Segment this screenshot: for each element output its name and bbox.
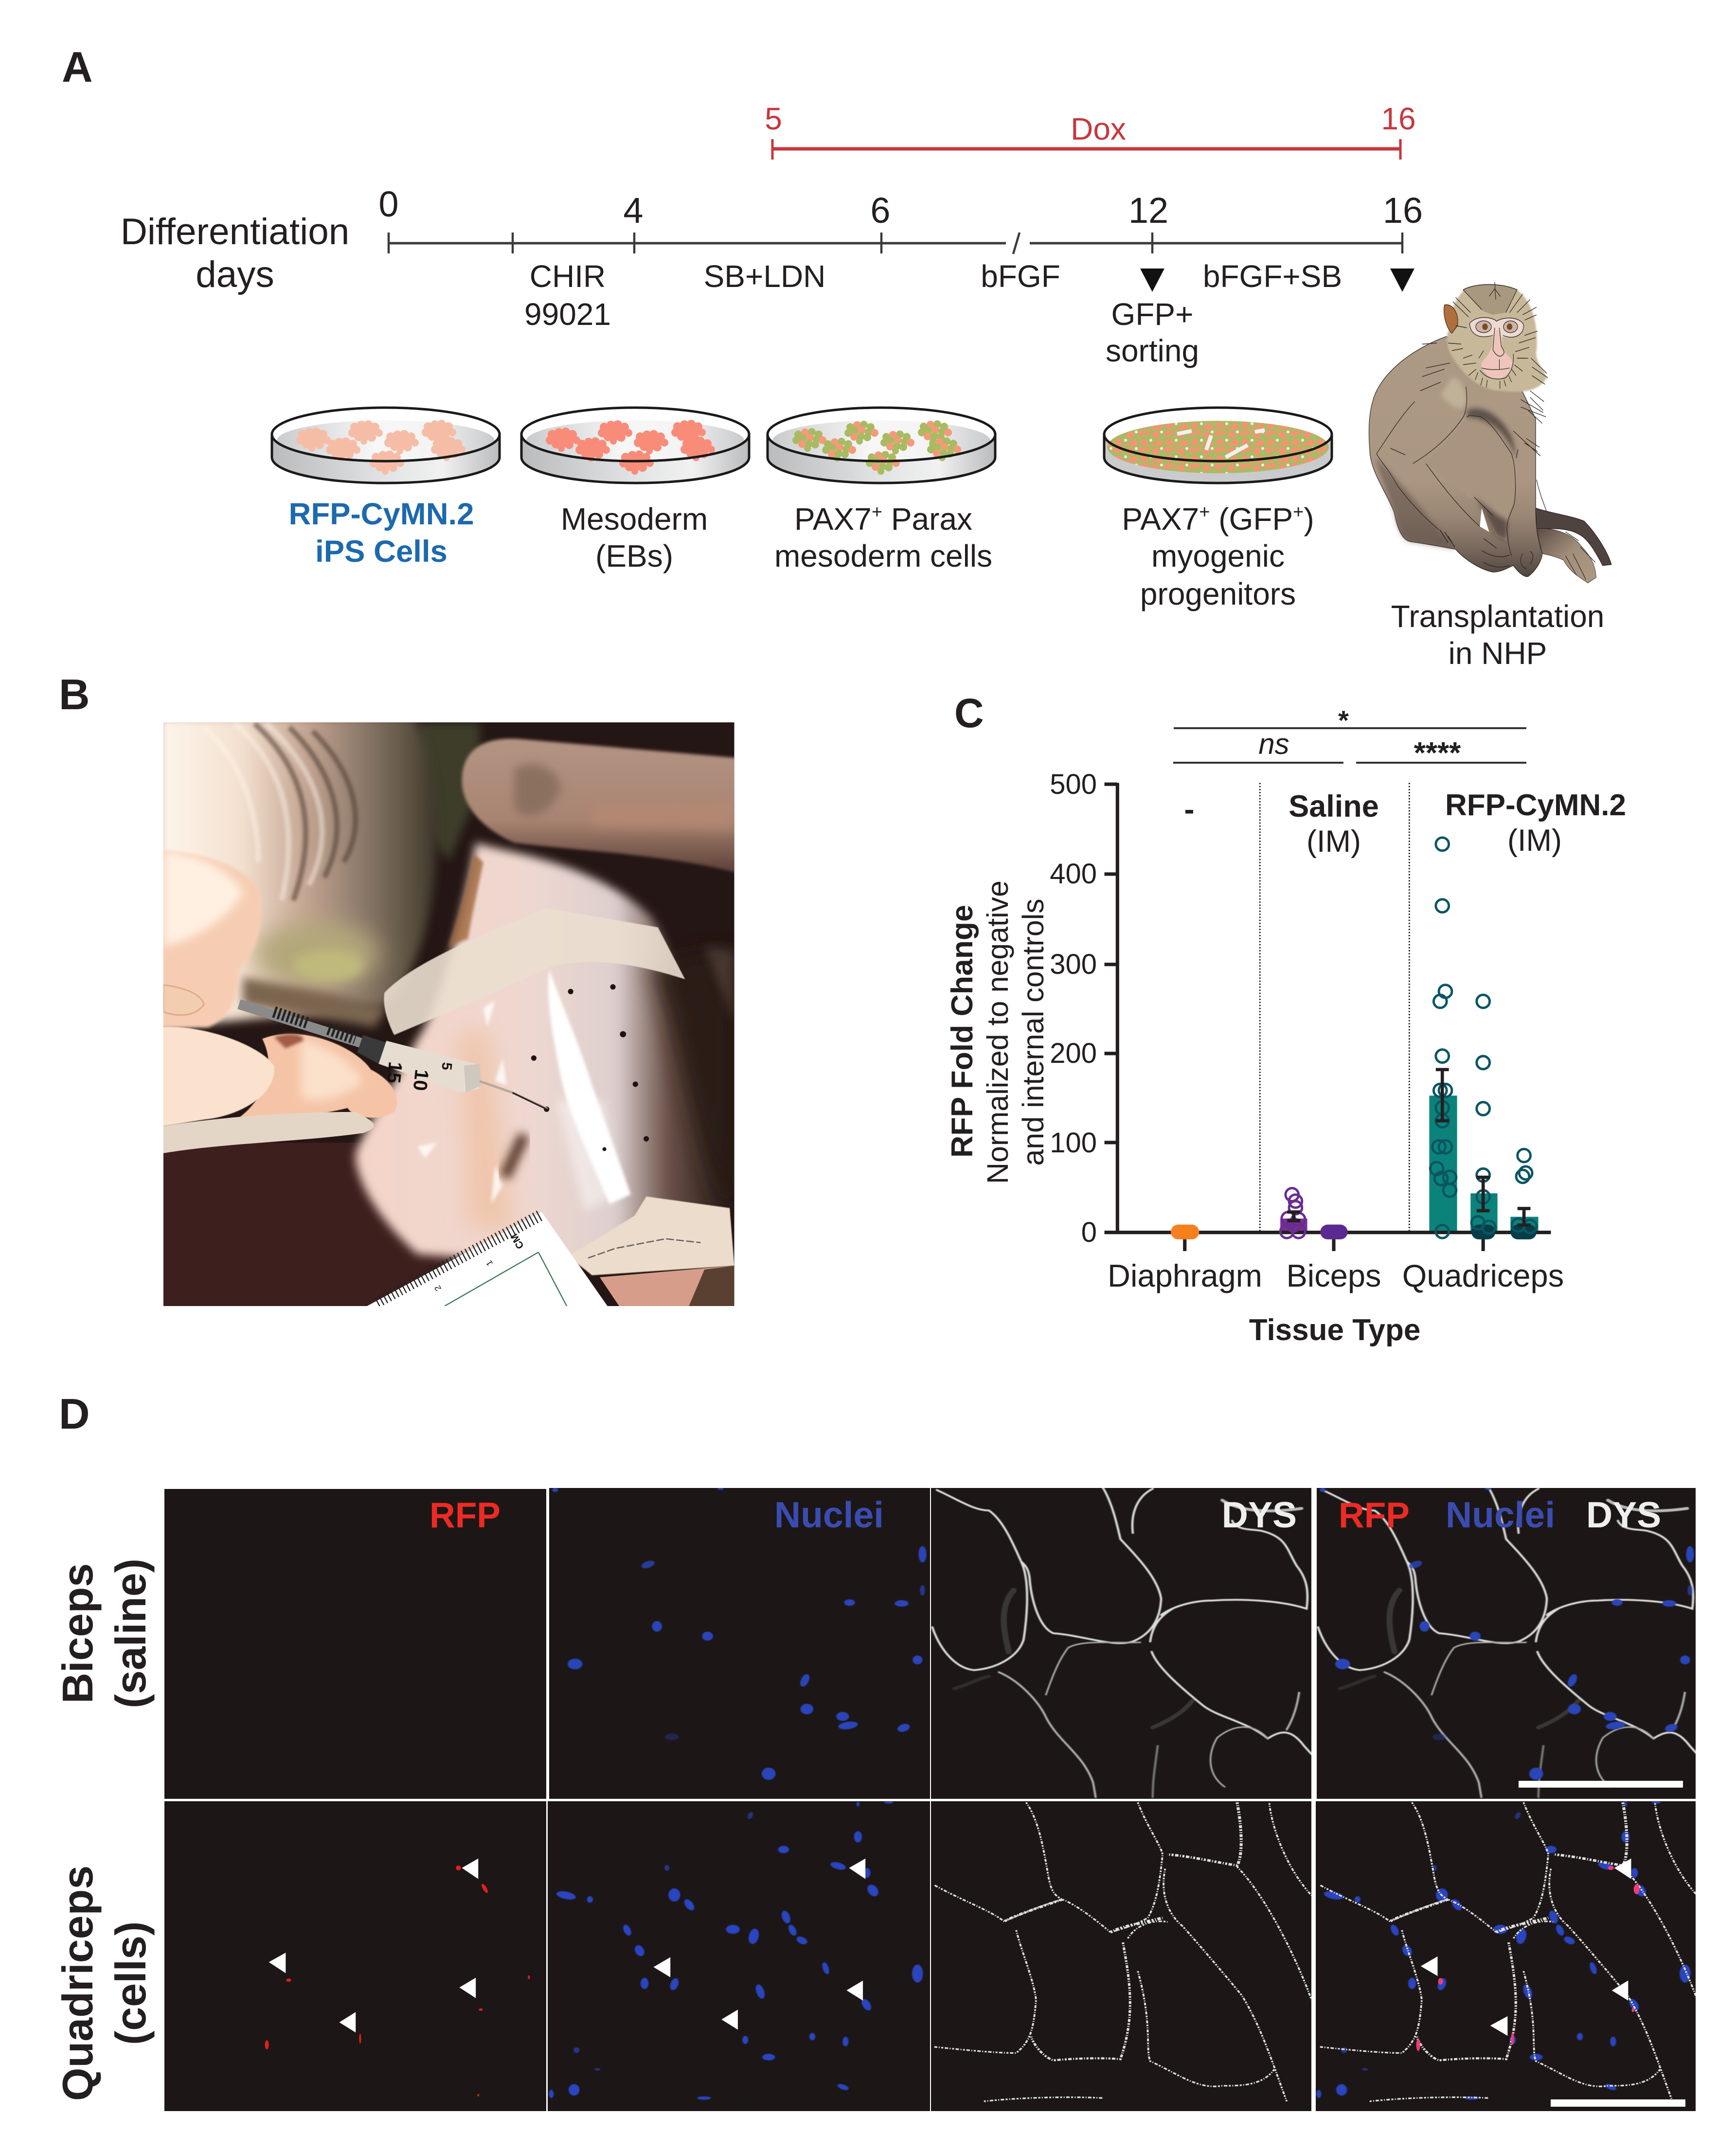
y axis title: Normalized to negative (981, 880, 1014, 1184)
timeline factor labels (524, 259, 1342, 368)
timeline factor labels: GFP+ (1111, 297, 1193, 332)
micrograph: quadriceps dystrophin (931, 1801, 1311, 2111)
ruler: CM (509, 1232, 526, 1251)
stage labels: (EBs) (595, 538, 673, 573)
timeline factor labels: bFGF (981, 259, 1060, 294)
panel B: injection photograph (59, 670, 739, 1306)
stage labels: iPS Cells (315, 535, 447, 569)
stage labels: + (872, 502, 882, 522)
ruler (367, 1212, 608, 1306)
panel D: immunofluorescence micrographs (54, 1390, 1697, 2134)
y axis labels: 100 (1050, 1127, 1097, 1159)
dish: PAX7+ paraxial mesoderm (768, 408, 995, 483)
row label: biceps saline: Biceps (54, 1563, 102, 1703)
stage labels: Mesoderm (561, 502, 708, 537)
stage labels: PAX7 (1122, 502, 1199, 537)
micrograph: biceps RFP (164, 1489, 546, 1799)
stage labels: + (1293, 502, 1304, 522)
stage labels: (GFP (1210, 502, 1293, 537)
syringe: 10 (409, 1068, 432, 1092)
stage labels (288, 497, 1604, 671)
group headings: RFP-CyMN.2 (1445, 788, 1626, 822)
label row: Nuclei (1446, 1494, 1555, 1535)
timeline axis: 16 (1383, 190, 1423, 231)
Dox bar: Dox (1071, 111, 1126, 146)
micrograph: biceps nuclei: Nuclei (774, 1494, 884, 1535)
panel letter C: C (954, 690, 984, 736)
group headings (1184, 788, 1626, 859)
micrograph: quadriceps RFP (164, 1801, 546, 2111)
stage labels: mesoderm cells (774, 538, 992, 573)
x axis labels: Biceps (1286, 1258, 1381, 1293)
micrograph: biceps nuclei (549, 1487, 930, 1799)
Dox bar: 16 (1381, 101, 1416, 136)
stage labels: + (1199, 502, 1210, 522)
dish: myogenic progenitors (1104, 408, 1332, 483)
x axis title: Tissue Type (1249, 1313, 1420, 1347)
panel letter A: A (62, 43, 93, 91)
timeline axis: 4 (623, 190, 644, 231)
stage labels: Transplantation (1391, 599, 1604, 634)
y axis labels: 200 (1050, 1038, 1097, 1069)
Dox bar: 5 (765, 101, 782, 136)
row label: quadriceps cells: (cells) (107, 1921, 155, 2045)
row label: biceps saline (54, 1559, 155, 1708)
icon: macaque (1369, 282, 1611, 583)
Dox bar (765, 101, 1416, 160)
y axis labels: 400 (1050, 858, 1097, 890)
stage labels: RFP-CyMN.2 (288, 497, 474, 531)
photograph (158, 716, 739, 1306)
syringe: 5 (438, 1061, 455, 1071)
timeline axis: 6 (870, 190, 891, 231)
label row: DYS (1586, 1494, 1661, 1535)
y axis title (945, 880, 1050, 1184)
timeline axis (378, 184, 1423, 254)
y axis labels (1050, 769, 1097, 1248)
timeline axis: 0 (378, 184, 399, 224)
x axis labels: Diaphragm (1108, 1258, 1262, 1293)
x axis labels: Quadriceps (1402, 1258, 1564, 1293)
micrograph: biceps dystrophin: DYS (1222, 1494, 1297, 1535)
stage labels: Parax (882, 502, 972, 537)
panel letter D: D (59, 1390, 90, 1438)
timeline factor labels: bFGF+SB (1203, 259, 1342, 294)
syringe (239, 1004, 547, 1110)
y axis title: and internal controls (1017, 898, 1050, 1166)
timeline heading (121, 211, 349, 295)
micrograph: biceps dystrophin (931, 1488, 1311, 1799)
timeline heading: Differentiation (121, 211, 349, 252)
timeline factor labels: CHIR (530, 259, 606, 294)
panel C: RFP fold change chart (945, 690, 1626, 1347)
dish: RFP-CyMN.2 iPS cells (272, 408, 500, 483)
plot: bars and points (1105, 783, 1551, 1251)
significance brackets: * (1338, 705, 1349, 735)
y axis labels: 500 (1050, 769, 1097, 800)
scale bar (1519, 1781, 1683, 1788)
stage labels: in NHP (1449, 636, 1547, 671)
label row: RFP (1339, 1496, 1410, 1535)
micrograph: biceps RFP: RFP (430, 1496, 501, 1535)
dish: mesoderm (521, 408, 749, 483)
label row (1339, 1494, 1661, 1535)
ruler: 1 (484, 1259, 495, 1268)
group headings: (IM) (1507, 824, 1562, 858)
stage labels: progenitors (1140, 576, 1296, 611)
group headings: (IM) (1306, 824, 1361, 859)
syringe: 15 (382, 1061, 406, 1084)
panel letter B: B (59, 670, 90, 718)
scale bar (1551, 2099, 1685, 2107)
stage labels: myogenic (1151, 538, 1285, 573)
x axis labels (1108, 1258, 1564, 1293)
y axis title: RFP Fold Change (945, 905, 979, 1158)
micrograph: quadriceps nuclei (548, 1801, 930, 2134)
y axis labels: 0 (1081, 1217, 1097, 1248)
y axis labels: 300 (1050, 949, 1097, 980)
significance brackets (1173, 705, 1526, 770)
arrowheads: day 12 and 16 (1140, 269, 1414, 292)
timeline factor labels: 99021 (524, 297, 611, 332)
timeline factor labels: sorting (1106, 333, 1199, 368)
stage labels: ) (1304, 502, 1314, 537)
timeline heading: days (196, 254, 274, 295)
significance brackets: ns (1258, 728, 1289, 760)
micrograph: biceps merged (1317, 1487, 1697, 1799)
micrograph: quadriceps merged (1316, 1801, 1697, 2134)
ruler: 2 (432, 1284, 443, 1292)
panel A: differentiation timeline (62, 43, 1611, 671)
group headings: Saline (1289, 789, 1379, 824)
group headings: - (1184, 792, 1194, 826)
stage labels: PAX7 (794, 502, 872, 537)
significance brackets: **** (1414, 736, 1461, 770)
row label: quadriceps cells: Quadriceps (54, 1865, 102, 2101)
row label: quadriceps cells (54, 1865, 155, 2101)
row label: biceps saline: (saline) (107, 1559, 155, 1708)
timeline axis: 12 (1128, 190, 1168, 231)
timeline factor labels: SB+LDN (704, 259, 825, 294)
